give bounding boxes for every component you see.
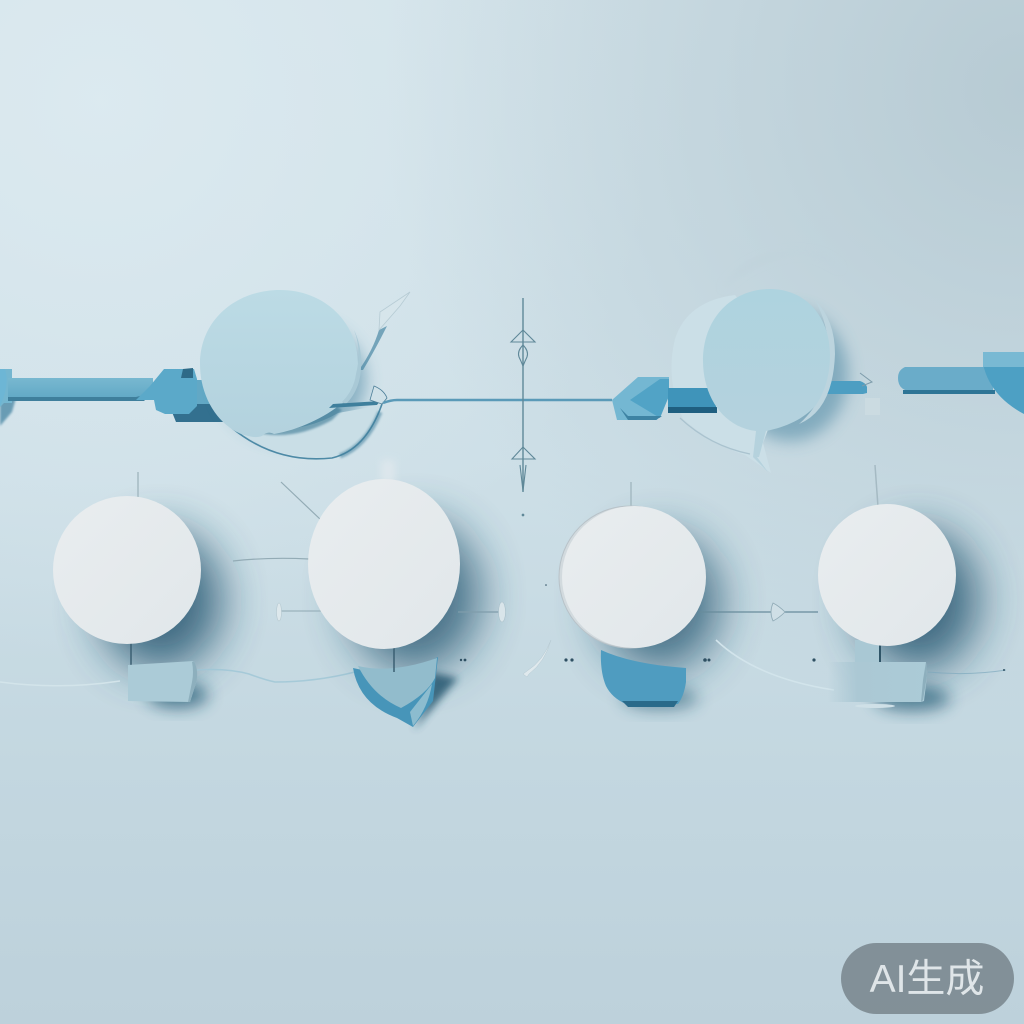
upper right speech bubble bbox=[703, 289, 835, 472]
step 2 node bbox=[233, 460, 506, 730]
badge: AI generated: AI生成 bbox=[870, 958, 984, 1001]
step 1 node bbox=[0, 472, 222, 708]
scattered dots bbox=[460, 584, 1005, 671]
central vertical arrow axis bbox=[511, 298, 535, 516]
left connector bar bbox=[0, 368, 226, 426]
step 4 node bbox=[716, 465, 1006, 711]
upper left speech circle bbox=[200, 290, 410, 459]
right arrow connector bbox=[612, 373, 880, 420]
connector line 1 bbox=[197, 670, 355, 682]
small curved tick bbox=[523, 640, 551, 677]
upper right bar bbox=[898, 352, 1024, 414]
step 3 node bbox=[559, 482, 818, 710]
central connector line bbox=[383, 400, 612, 403]
right speech bubble backdrop bbox=[671, 252, 848, 473]
badge: AI generated bbox=[841, 943, 1014, 1014]
